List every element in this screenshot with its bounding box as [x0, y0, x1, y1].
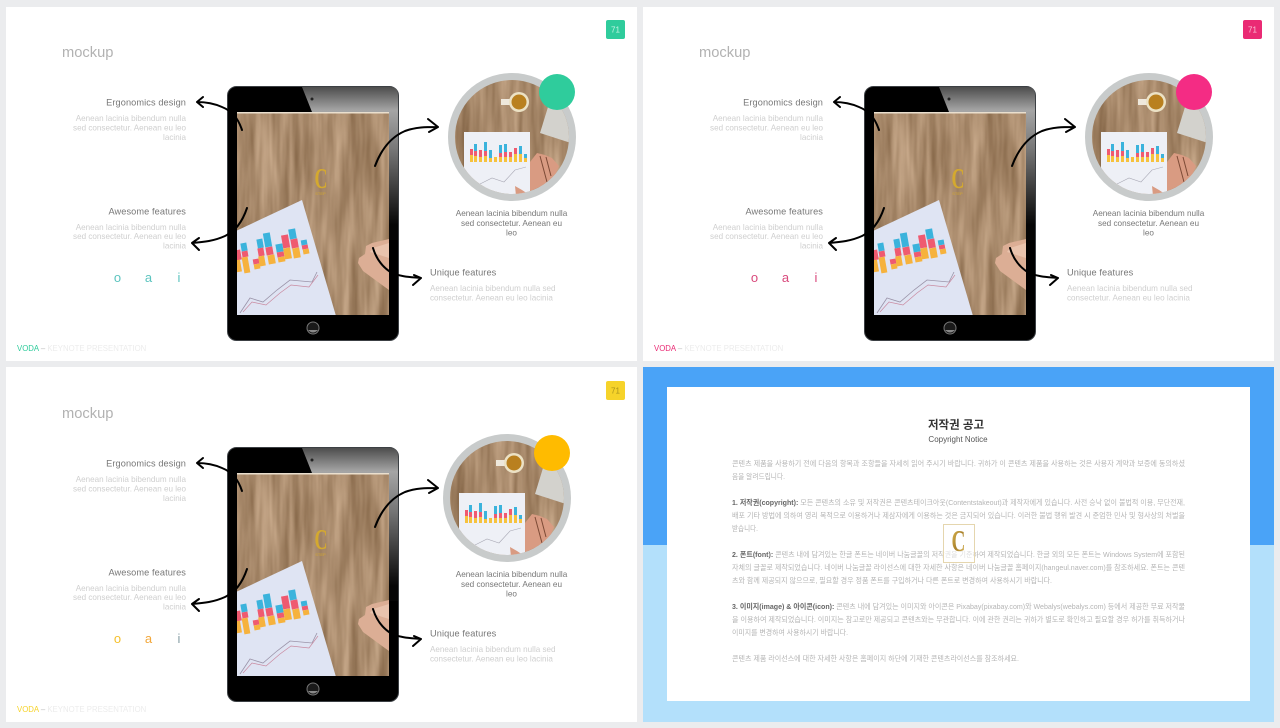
text block: unique features: [430, 268, 556, 302]
page number badge: [606, 381, 625, 400]
text block: unique features: consectetur. Aenean eu leo lacinia: [430, 654, 553, 664]
icon row: [751, 270, 818, 285]
section 1: copyright: 1. 저작권(copyright): 모든 콘텐츠의 소유 및 저작권은 콘텐츠테이크아웃(Contentstakeout)과 제작자에게 있습니다. 사전 승낙 없이 불법적 이용, 무단전재,: [732, 498, 1185, 507]
arrows: [192, 97, 438, 285]
text block: awesome features: sed consectetur. Aenean eu leo: [73, 593, 186, 602]
icon row: a: [145, 631, 153, 646]
text block: unique features: consectetur. Aenean eu leo lacinia: [1067, 294, 1190, 302]
section 2: font: 츠와 함께 제공되지 않으므로, 필요할 경우 정품 폰트를 구입하거나 다른 폰트로 변경하여 사용하시기 바랍니다.: [732, 576, 1052, 585]
page number badge: 71: [611, 386, 620, 396]
text block: unique features: [430, 628, 556, 664]
closing note: 콘텐츠 제품 라이선스에 대한 자세한 사항은 홈페이지 하단에 기재한 콘텐츠라이선스를 참조하세요.: [732, 654, 1019, 663]
section 3: image and icon: 을 이용하여 제작되었습니다. 이미지는 참고로만 제공되고 콘텐츠와는 무관합니다. 이에 관한 권리는 귀하가 별도로 확인하고 필요할 경우 허가를 취득하거나: [732, 615, 1185, 624]
circular photo: [443, 434, 571, 562]
caption: leo: [506, 228, 517, 238]
text block: awesome features: lacinia: [163, 242, 186, 250]
text block: awesome features: Aenean lacinia bibendum nulla: [76, 584, 186, 593]
caption: Aenean lacinia bibendum nulla: [1093, 209, 1205, 218]
icon row: i: [178, 270, 181, 285]
icon row: [114, 631, 181, 646]
icon row: a: [782, 270, 790, 285]
text block: awesome features: [710, 206, 823, 250]
text block: ergonomics design: sed consectetur. Aenean eu leo: [73, 124, 186, 132]
footer: VODA – KEYNOTE PRESENTATION: [17, 344, 146, 353]
text block: unique features: Aenean lacinia bibendum nulla sed: [430, 284, 556, 293]
text block: ergonomics design: lacinia: [163, 133, 186, 142]
tablet mockup: [864, 86, 1036, 340]
colored dot: [534, 435, 570, 471]
text block: ergonomics design: Aenean lacinia bibendum nulla: [76, 475, 186, 484]
page number badge: 71: [611, 26, 620, 34]
circular photo: [1085, 73, 1213, 201]
text block: awesome features: [73, 206, 186, 250]
section 1: copyright: [732, 498, 1185, 533]
caption: [456, 209, 568, 238]
text block: awesome features: Awesome features: [108, 206, 186, 216]
watermark logo: C: [952, 523, 965, 558]
intro text: [732, 459, 1185, 481]
heading: 저작권 공고: [928, 418, 984, 432]
panel: teal mockup slide: [6, 7, 637, 361]
text block: awesome features: Aenean lacinia bibendum nulla: [76, 223, 186, 232]
text block: awesome features: Awesome features: [745, 206, 823, 216]
text block: unique features: consectetur. Aenean eu leo lacinia: [430, 294, 553, 302]
text block: ergonomics design: sed consectetur. Aenean eu leo: [73, 484, 186, 494]
tablet mockup: [228, 86, 398, 340]
section 3: image and icon: 3. 이미지(image) & 아이콘(icon): 콘텐츠 내에 담겨있는 이미지와 아이콘은 Pixabay(pixabay.com)와 Webalys(webalys.com) 등에서 제공한 무료 저작물: [732, 602, 1185, 611]
title: mockup: [699, 45, 750, 61]
text block: awesome features: Awesome features: [108, 568, 186, 578]
title: mockup: [62, 45, 113, 61]
title: mockup: [62, 406, 113, 422]
text block: ergonomics design: [710, 98, 823, 142]
text block: ergonomics design: [73, 458, 186, 503]
icon row: o: [114, 270, 121, 285]
page number badge: [1243, 20, 1262, 39]
panel: pink mockup slide: [643, 7, 1274, 361]
text block: awesome features: Aenean lacinia bibendum nulla: [713, 223, 823, 232]
section 3: image and icon: 이미지를 변경하여 사용하시기 바랍니다.: [732, 628, 848, 637]
text block: ergonomics design: lacinia: [800, 133, 823, 142]
text block: unique features: Unique features: [430, 628, 497, 638]
text block: ergonomics design: lacinia: [163, 494, 186, 503]
icon row: i: [815, 270, 818, 285]
text block: unique features: Aenean lacinia bibendum nulla sed: [430, 645, 556, 654]
text block: awesome features: lacinia: [163, 602, 186, 612]
caption: sed consectetur. Aenean eu: [461, 219, 562, 228]
section 2: font: [732, 550, 1185, 585]
text block: awesome features: lacinia: [800, 242, 823, 250]
text block: awesome features: [73, 568, 186, 612]
panel: yellow mockup slide: [6, 367, 637, 722]
panel: copyright notice: [643, 367, 1274, 722]
arrows: [192, 458, 438, 646]
section 1: copyright: 배포 기타 방법에 의하여 영리 목적으로 이용하거나 제삼자에게 이용하는 것은 금지되어 있습니다. 이러한 불법 행위 발견 시 준엄한 민사 및 형사상의 처벌을: [732, 511, 1185, 520]
text block: ergonomics design: Ergonomics design: [106, 458, 186, 468]
text block: unique features: Unique features: [430, 268, 497, 278]
caption: sed consectetur. Aenean eu: [461, 580, 562, 589]
circular photo: [448, 73, 576, 201]
icon row: a: [145, 270, 153, 285]
intro text: 음을 알려드립니다.: [732, 472, 785, 481]
tablet mockup: [228, 448, 398, 702]
text block: unique features: [1067, 268, 1193, 302]
footer: VODA – KEYNOTE PRESENTATION: [654, 344, 783, 353]
caption: Aenean lacinia bibendum nulla: [456, 209, 568, 218]
caption: leo: [506, 590, 517, 598]
footer: VODA – KEYNOTE PRESENTATION: [17, 705, 146, 714]
section 1: copyright: 받습니다.: [732, 524, 758, 533]
text block: unique features: Aenean lacinia bibendum nulla sed: [1067, 284, 1193, 293]
icon row: o: [751, 270, 758, 285]
section 3: image and icon: [732, 602, 1185, 637]
colored dot: [1176, 74, 1212, 110]
icon row: i: [178, 631, 181, 646]
caption: leo: [1143, 228, 1154, 238]
text block: awesome features: sed consectetur. Aenean eu leo: [710, 232, 823, 241]
text block: ergonomics design: Ergonomics design: [106, 98, 186, 108]
section 2: font: 2. 폰트(font): 콘텐츠 내에 담겨있는 한글 폰트는 네이버 나눔글꼴의 저작권을 기준하여 제작되었습니다. 한글 외의 모든 폰트는 Windows System에 포함된: [732, 550, 1185, 559]
icon row: o: [114, 631, 121, 646]
page number badge: 71: [1248, 26, 1257, 34]
caption: [1093, 209, 1205, 238]
text block: ergonomics design: Aenean lacinia bibendum nulla: [713, 114, 823, 123]
intro text: 콘텐츠 제품을 사용하기 전에 다음의 항목과 조항들을 자세히 읽어 주시기 바랍니다. 귀하가 이 콘텐츠 제품을 사용하는 것은 사용자 계약과 보증에 동의하셨: [732, 459, 1185, 468]
page number badge: [606, 20, 625, 39]
text block: ergonomics design: [73, 98, 186, 142]
watermark logo: [944, 523, 974, 562]
text block: unique features: Unique features: [1067, 268, 1134, 278]
caption: [456, 570, 568, 598]
icon row: [114, 270, 181, 285]
text block: ergonomics design: sed consectetur. Aenean eu leo: [710, 124, 823, 132]
arrows: [829, 97, 1075, 285]
caption: sed consectetur. Aenean eu: [1098, 219, 1199, 228]
caption: Aenean lacinia bibendum nulla: [456, 570, 568, 579]
section 2: font: 자체의 글꼴로 제작되었습니다. 네이버 나눔글꼴 라이선스에 대한 자세한 사항은 네이버 나눔글꼴 홈페이지(hangeul.naver.com)를 참조하세요. 폰트는 콘텐: [732, 563, 1185, 572]
text block: ergonomics design: Ergonomics design: [743, 98, 823, 108]
subheading: Copyright Notice: [928, 435, 988, 444]
text block: awesome features: sed consectetur. Aenean eu leo: [73, 232, 186, 241]
text block: ergonomics design: Aenean lacinia bibendum nulla: [76, 114, 186, 123]
colored dot: [539, 74, 575, 110]
